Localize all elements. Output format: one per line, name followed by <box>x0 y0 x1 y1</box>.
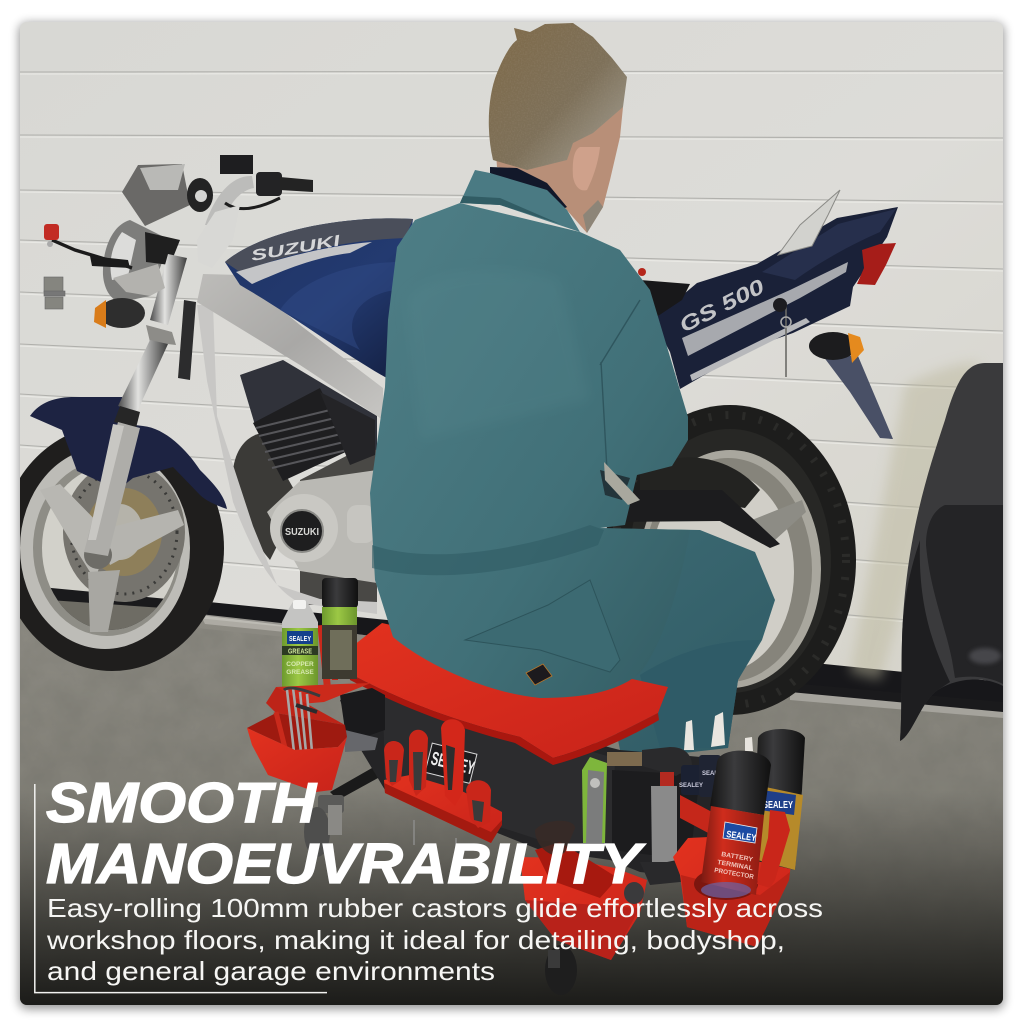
stool strut and rear castor <box>304 768 378 857</box>
front indicator <box>94 298 145 328</box>
motorcycle rear wheel <box>604 405 856 715</box>
screwdrivers <box>384 719 491 828</box>
threadlock bottles <box>679 712 753 797</box>
body text <box>46 893 823 986</box>
engine fins <box>253 388 350 481</box>
spray can: copper grease: COPPER <box>286 661 314 668</box>
threshold strip <box>206 602 1003 702</box>
blow torch <box>607 747 700 885</box>
stool storage base <box>340 690 735 880</box>
red hanging bucket left <box>247 688 347 792</box>
bottom dark gradient overlay <box>20 790 1003 1005</box>
SEALEY plate on stool <box>425 743 477 783</box>
red cup holder right <box>673 837 793 947</box>
door hinge <box>44 277 65 309</box>
side tray and storage void <box>266 683 385 752</box>
fork bracket <box>113 264 165 296</box>
body text: Easy-rolling 100mm rubber castors glide effortlessly across <box>47 893 823 923</box>
stool red padded seat <box>344 623 668 765</box>
silver frame <box>197 274 383 614</box>
spray can: battery terminal protector: BATTERY <box>721 851 754 864</box>
front mudguard <box>30 397 227 509</box>
spray can: green rear <box>322 578 358 679</box>
heading: SMOOTH <box>46 771 318 835</box>
exhaust and engine block <box>233 360 377 605</box>
hex key set <box>276 688 320 752</box>
rear fork leg <box>178 300 196 380</box>
spray can: battery terminal protector: TERMINAL <box>717 859 753 872</box>
threadlock bottles: SEALEY <box>679 783 703 789</box>
GS 500 decal: GS 500 <box>676 275 769 337</box>
mechanic neck and face <box>495 107 623 233</box>
red hanging bucket front <box>520 842 647 960</box>
spray can: yellow behind: SEALEY <box>763 800 793 811</box>
spray can: battery terminal protector: SEALEY <box>726 829 757 844</box>
tail lamp <box>857 243 896 285</box>
motorcycle tail section <box>638 190 898 439</box>
chain guard and swingarm <box>634 500 780 548</box>
safety glasses <box>535 821 575 855</box>
workwear badge <box>526 664 552 685</box>
threadlock bottles: SEAL <box>702 771 718 777</box>
hub and sprocket <box>662 458 760 508</box>
spray can: copper grease: GREASE <box>286 669 314 676</box>
SEALEY plate on stool: SEALEY <box>429 748 477 780</box>
rear indicator <box>809 332 851 360</box>
engine head <box>240 360 377 450</box>
handlebars and instruments <box>122 155 313 248</box>
spray can: copper grease: GREASE <box>288 648 312 656</box>
body text: workshop floors, making it ideal for detailing, bodyshop, <box>46 925 785 955</box>
brake lever and mirror stub <box>44 224 132 268</box>
garage door wall <box>20 22 1003 722</box>
spray can: battery terminal protector: PROTECTOR <box>714 867 755 881</box>
SUZUKI tank decal: SUZUKI <box>250 232 342 265</box>
screwdriver tray <box>384 775 502 862</box>
bracket line frame <box>35 784 327 993</box>
front forks <box>84 254 187 556</box>
heading <box>46 771 646 896</box>
wheel spokes <box>46 484 99 572</box>
spray can: copper grease holder tools <box>317 618 338 685</box>
wrapped bar clamp <box>197 206 240 248</box>
headlight <box>102 220 162 300</box>
spray can: yellow behind <box>750 729 805 870</box>
front castor <box>545 945 577 995</box>
brake disc <box>63 462 185 602</box>
mechanic torso <box>370 203 690 698</box>
rear pillion cowl <box>778 190 840 255</box>
key fob <box>785 302 787 377</box>
glove <box>640 280 690 318</box>
rear mudguard <box>823 356 893 439</box>
wrist strap detail <box>604 462 640 505</box>
mechanic hair <box>488 22 628 177</box>
spray can: battery terminal protector <box>701 751 771 898</box>
spray can: copper grease <box>282 600 318 688</box>
folding saw <box>582 757 607 843</box>
shadow of seat on wall <box>850 362 980 680</box>
crankcase <box>267 470 377 583</box>
heading: MANOEUVRABILITY <box>46 832 646 896</box>
exhaust and engine block: SUZUKI <box>285 527 319 538</box>
motorcycle front wheel <box>20 436 224 671</box>
red handled tool in holder <box>757 810 790 888</box>
mechanic thigh and lower leg <box>602 528 775 753</box>
fuel tank <box>225 218 413 381</box>
red tray rear right <box>680 795 712 835</box>
overalls collar <box>460 167 580 232</box>
body text: and general garage environments <box>47 956 495 986</box>
spray can: copper grease: SEALEY <box>289 634 311 643</box>
loose motorcycle seat leaning on wall <box>900 363 1003 741</box>
floor <box>20 587 1003 1005</box>
